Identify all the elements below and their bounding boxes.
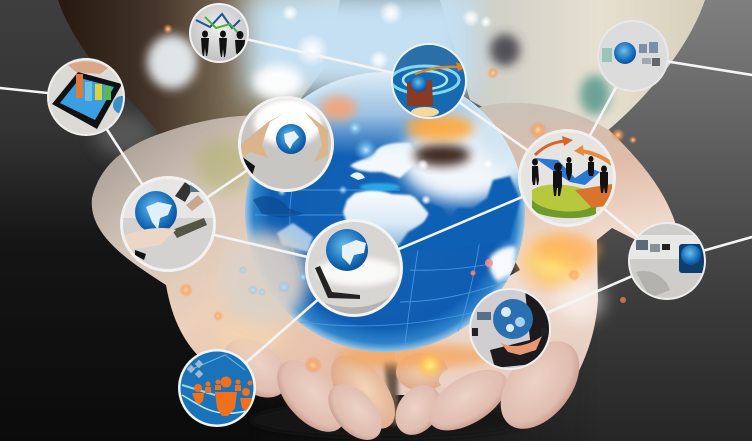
upper arm, right [440, 0, 705, 140]
node: orange people on blue network [178, 349, 256, 427]
globe top wash [245, 72, 525, 352]
node: laptop and globe [305, 219, 403, 320]
node: silhouettes with line chart [189, 3, 249, 63]
node: globe and gadgets [597, 20, 669, 92]
globe grid lines [255, 190, 520, 345]
dark and orange blurs over globe [147, 34, 610, 166]
node: wave with tablet and arrow [391, 43, 467, 119]
left hand fingers [213, 326, 408, 441]
shadow under fingers [250, 402, 530, 438]
node: hand holding globe of pictures [469, 288, 552, 370]
node: hands around globe [238, 96, 334, 192]
gap between the hands [384, 362, 398, 425]
globe continents [253, 106, 522, 284]
node: devices and tablet globe [628, 222, 706, 300]
glow on palm: yellow and orange [195, 139, 604, 368]
node: tablet with bar chart [47, 58, 131, 136]
node: pie chart with people and arrows [518, 129, 616, 227]
left hand [92, 116, 400, 395]
faded lower-left of globe [220, 232, 308, 324]
sky glow behind globe [245, 0, 475, 95]
upper arm, left [58, 0, 340, 136]
globe [220, 72, 535, 352]
right hand [395, 103, 676, 395]
right hand fingers [386, 327, 595, 441]
light sparkles [163, 1, 637, 380]
node: globe with photo strip [120, 176, 216, 272]
